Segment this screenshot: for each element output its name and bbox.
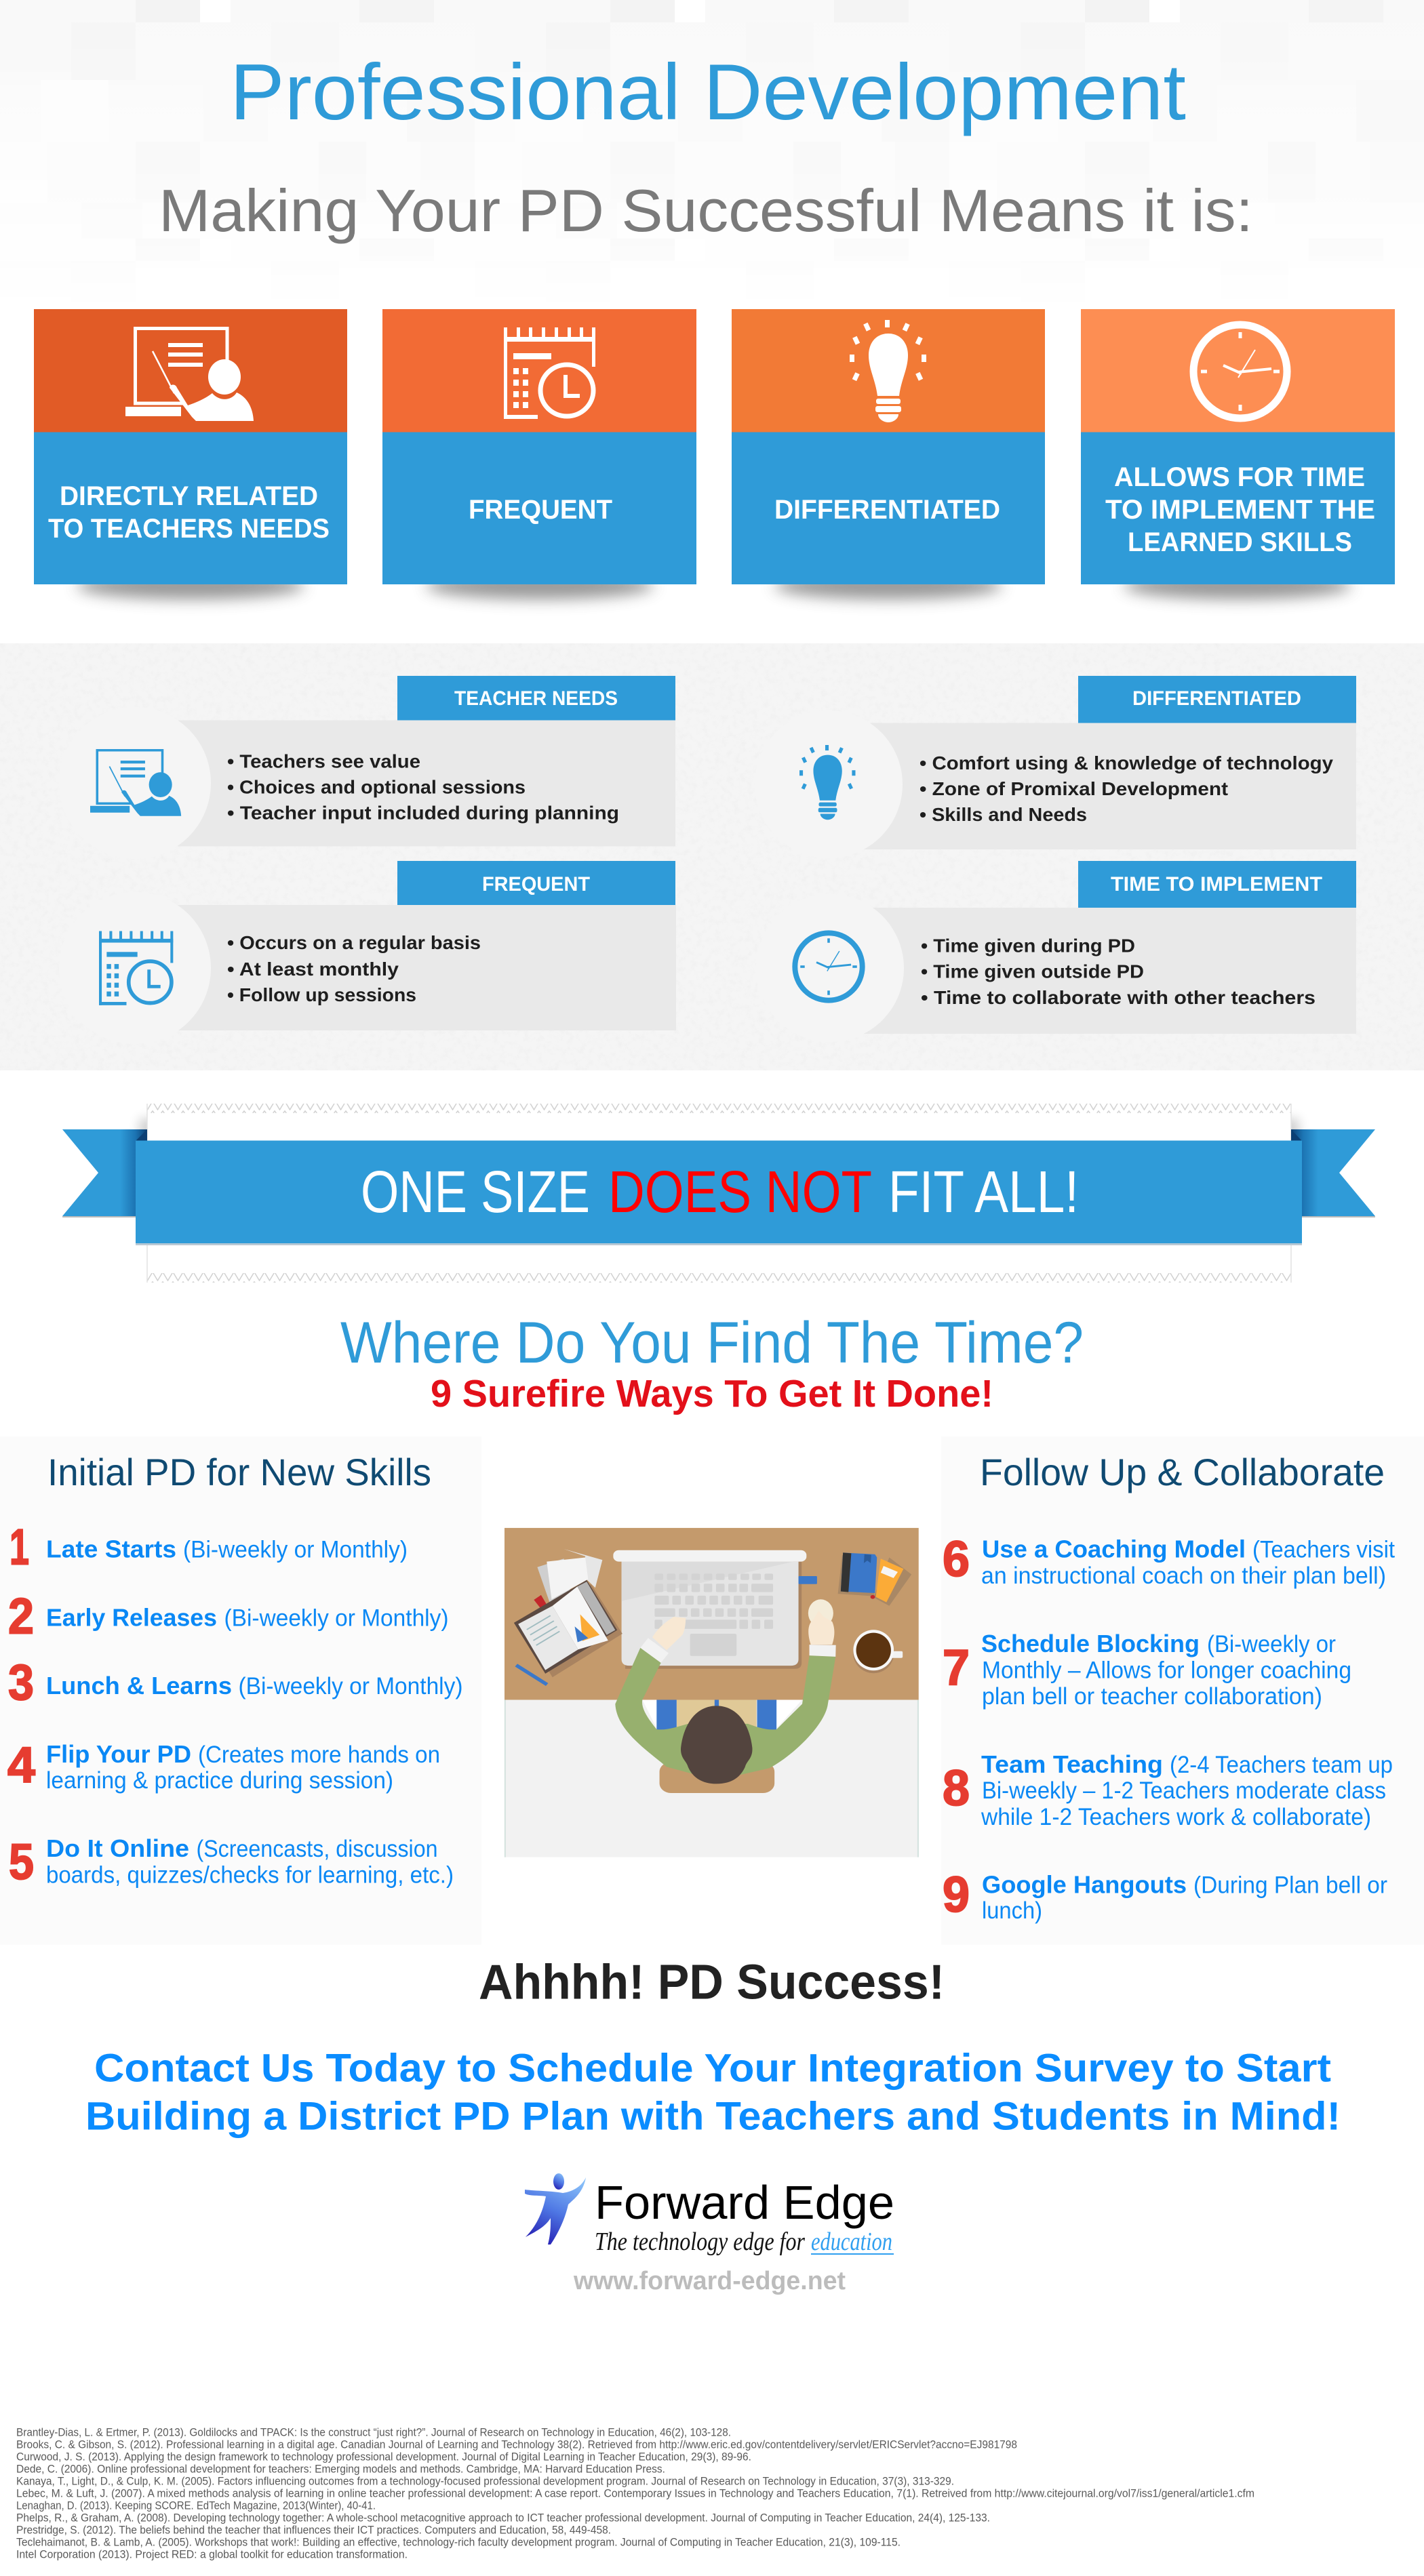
item 4: (Creates more hands on <box>198 1742 440 1768</box>
website url: www.forward-edge.net <box>573 2267 846 2295</box>
card label: TO TEACHERS NEEDS <box>48 514 330 544</box>
item 1: 1 <box>9 1518 29 1575</box>
bullet list <box>227 932 481 1005</box>
call to action: Building a District PD Plan with Teachers and Students in Mind! <box>85 2095 1341 2138</box>
item 1: Late Starts <box>46 1535 176 1563</box>
item 7: plan bell or teacher collaboration) <box>982 1683 1322 1710</box>
item 5 <box>9 1834 454 1890</box>
references: Lebec, M. & Luft, J. (2007). A mixed methods analysis of learning in online teacher professional development: A case report. Contemporary Issues in Technology and Teachers Education, 7(1). Retreived from http://www.citejournal.org/vol7/iss1/general/article1.cfm <box>16 2487 1254 2499</box>
bullet list <box>919 752 1333 825</box>
item 7: (Bi-weekly or <box>1207 1631 1336 1657</box>
item 8: 8 <box>943 1760 970 1816</box>
item 9 <box>943 1866 1387 1924</box>
bullet list: • Follow up sessions <box>227 984 416 1005</box>
icon: teacher <box>90 750 181 816</box>
references: Phelps, R., & Graham, A. (2008). Developing technology together: A whole-school metacognitive approach to ICT teacher professional development. Journal of Computing in Teacher Education, 24(4), 125-133. <box>16 2511 990 2524</box>
logo: Forward Edge <box>525 2173 894 2256</box>
item 5: Do It Online <box>46 1834 189 1862</box>
panel heading: Initial PD for New Skills <box>47 1451 431 1493</box>
card: frequent <box>382 309 696 599</box>
item 7: 7 <box>943 1639 970 1696</box>
call to action <box>85 2046 1341 2138</box>
item 2: (Bi-weekly or Monthly) <box>224 1605 449 1631</box>
item 8: Bi-weekly – 1-2 Teachers moderate class <box>982 1777 1386 1804</box>
detail: time to implement <box>756 861 1356 1042</box>
references: Kanaya, T., Light, D., & Culp, K. M. (2005). Factors influencing outcomes from a technology-focused professional development program. Journal of Research on Technology in Education, 37(3), 313-329. <box>16 2474 954 2487</box>
item 2: 2 <box>8 1588 34 1645</box>
banner text: DOES NOT <box>608 1159 872 1225</box>
illustration: person working at desk <box>505 1528 919 1857</box>
header text: FREQUENT <box>482 873 590 895</box>
seat <box>660 1762 774 1793</box>
panel: follow up and collaborate <box>941 1436 1424 1945</box>
person: head <box>681 1706 752 1784</box>
references: Dede, C. (2006). Online professional development for teachers: Emerging models and methods. Cambridge, MA: Harvard Education Press. <box>16 2462 665 2475</box>
item 9: lunch) <box>982 1897 1042 1924</box>
bullet list: • Teachers see value <box>227 751 420 771</box>
detail: teacher needs <box>59 676 675 859</box>
item 8: Team Teaching <box>981 1750 1163 1778</box>
bullet list: • Time given outside PD <box>921 961 1144 982</box>
call to action: Contact Us Today to Schedule Your Integration Survey to Start <box>94 2046 1331 2091</box>
panel: paper textured details section <box>0 643 1424 1070</box>
bullet list <box>921 935 1316 1008</box>
item 1 <box>9 1518 408 1575</box>
references: Brooks, C. & Gibson, S. (2012). Professional learning in a digital age. Canadian Journal of Learning and Technology 38(2). Retrieved from http://www.eric.ed.gov/contentdelivery/servlet/ERICServlet?accno=EJ981798 <box>16 2438 1017 2451</box>
logo tagline: The technology edge for <box>595 2228 805 2256</box>
icon: light bulb <box>850 320 926 422</box>
references: Teclehaimanot, B. & Lamb, A. (2005). Workshops that work!: Building an effective, technology-rich faculty development program. Journal of Computing in Teacher Education, 21(3), 109-115. <box>16 2535 901 2548</box>
card label: FREQUENT <box>469 495 612 525</box>
card label: DIRECTLY RELATED <box>60 481 318 511</box>
references: Prestridge, S. (2012). The beliefs behind the teacher that influences their ICT practices. Computers and Education, 58, 449-458. <box>16 2523 611 2536</box>
references: Intel Corporation (2013). Project RED: a global toolkit for education transformation. <box>16 2548 408 2560</box>
icon: calendar <box>99 931 173 1005</box>
card label: ALLOWS FOR TIME <box>1114 462 1365 492</box>
panel: four key attributes <box>34 309 1395 599</box>
card label: LEARNED SKILLS <box>1128 527 1352 557</box>
item 2 <box>8 1588 449 1645</box>
coffee cup <box>853 1630 903 1673</box>
header text: TIME TO IMPLEMENT <box>1111 873 1322 895</box>
subtitle: Making Your PD Successful Means it is: <box>159 177 1253 244</box>
item 4: Flip Your PD <box>46 1740 191 1768</box>
detail: frequent <box>59 861 676 1044</box>
item 7: Monthly – Allows for longer coaching <box>982 1657 1351 1684</box>
logo tagline: education <box>811 2228 892 2256</box>
card label <box>1105 462 1375 557</box>
card label <box>48 481 330 544</box>
item 6: 6 <box>943 1531 970 1587</box>
card: allows for time <box>1081 309 1395 599</box>
icon: clock <box>1193 325 1287 418</box>
card: differentiated <box>732 309 1045 599</box>
bullet list: • Comfort using & knowledge of technology <box>919 752 1333 773</box>
success heading: Ahhhh! PD Success! <box>479 1955 945 2009</box>
header text: DIFFERENTIATED <box>1132 687 1301 710</box>
person: arms and shoulders <box>615 1648 835 1780</box>
bullet list <box>227 751 619 823</box>
heading: where do you find the time: Where Do You Find The Time? <box>340 1310 1084 1375</box>
item 8 <box>943 1750 1393 1830</box>
card label: DIFFERENTIATED <box>774 495 1000 525</box>
item 5: boards, quizzes/checks for learning, etc.) <box>46 1861 454 1889</box>
icon: teacher at board <box>125 328 254 421</box>
item 9: (During Plan bell or <box>1193 1872 1387 1898</box>
bullet list: • Zone of Promixal Development <box>919 778 1228 799</box>
icon: clock <box>795 933 863 1001</box>
item 3 <box>8 1654 462 1710</box>
icon: calendar with clock <box>504 327 595 419</box>
references: Curwood, J. S. (2013). Applying the design framework to technology professional development. Journal of Digital Learning in Teacher Education, 29(3), 89-96. <box>16 2450 751 2463</box>
card label: TO IMPLEMENT THE <box>1105 495 1375 525</box>
item 4: learning & practice during session) <box>46 1767 393 1794</box>
item 8: while 1-2 Teachers work & collaborate) <box>981 1804 1371 1830</box>
bullet list: • Time to collaborate with other teachers <box>921 987 1316 1008</box>
title: Professional Development <box>230 47 1186 136</box>
item 6: an instructional coach on their plan bell) <box>981 1563 1386 1589</box>
item 3: (Bi-weekly or Monthly) <box>239 1673 462 1699</box>
banner text <box>361 1159 1079 1225</box>
references: Brantley-Dias, L. & Ertmer, P. (2013). Goldilocks and TPACK: Is the construct “just right?”. Journal of Research on Technology in Education, 46(2), 103-128. <box>16 2426 731 2438</box>
person: hands and mouse <box>640 1599 836 1663</box>
item 3: Lunch & Learns <box>46 1672 232 1699</box>
laptop <box>613 1550 817 1669</box>
references <box>16 2426 1254 2560</box>
bullet list: • Skills and Needs <box>919 804 1087 825</box>
item 4: 4 <box>7 1737 35 1793</box>
detail: differentiated <box>755 676 1356 858</box>
item 7: Schedule Blocking <box>981 1630 1200 1657</box>
panel heading: Follow Up & Collaborate <box>980 1451 1385 1493</box>
bullet list: • At least monthly <box>227 959 399 980</box>
item 7 <box>943 1630 1351 1710</box>
banner text: ONE SIZE <box>361 1159 590 1225</box>
papers and notebook <box>514 1549 622 1685</box>
item 6 <box>943 1531 1395 1589</box>
item 8: (2-4 Teachers team up <box>1170 1752 1393 1778</box>
bullet list: • Teacher input included during planning <box>227 803 619 823</box>
item 5: (Screencasts, discussion <box>197 1836 438 1862</box>
header text: TEACHER NEEDS <box>454 687 618 710</box>
books <box>838 1552 911 1606</box>
item 3: 3 <box>8 1654 34 1710</box>
item 2: Early Releases <box>46 1604 217 1631</box>
bullet list: • Occurs on a regular basis <box>227 932 481 953</box>
item 5: 5 <box>9 1834 34 1890</box>
item 6: Use a Coaching Model <box>982 1535 1246 1563</box>
panel: initial PD for new skills <box>0 1436 481 1945</box>
icon: logo figure <box>525 2173 586 2245</box>
bullet list: • Choices and optional sessions <box>227 777 526 797</box>
item 9: 9 <box>943 1866 970 1923</box>
subheading: nine ways: 9 Surefire Ways To Get It Done! <box>431 1372 993 1415</box>
card: directly related <box>34 309 347 599</box>
header background: pixel pattern <box>71 0 1383 50</box>
banner text: FIT ALL! <box>888 1159 1079 1225</box>
item 9: Google Hangouts <box>982 1871 1187 1898</box>
logo name: Forward Edge <box>595 2176 894 2229</box>
ribbon banner <box>62 1104 1375 1283</box>
item 6: (Teachers visit <box>1252 1536 1395 1563</box>
icon: bulb <box>799 745 855 820</box>
references: Lenaghan, D. (2013). Keeping SCORE. EdTech Magazine, 2013(Winter), 40-41. <box>16 2499 376 2512</box>
item 1: (Bi-weekly or Monthly) <box>183 1536 408 1563</box>
bullet list: • Time given during PD <box>921 935 1135 956</box>
item 4 <box>7 1737 440 1794</box>
chair back <box>642 1699 802 1730</box>
